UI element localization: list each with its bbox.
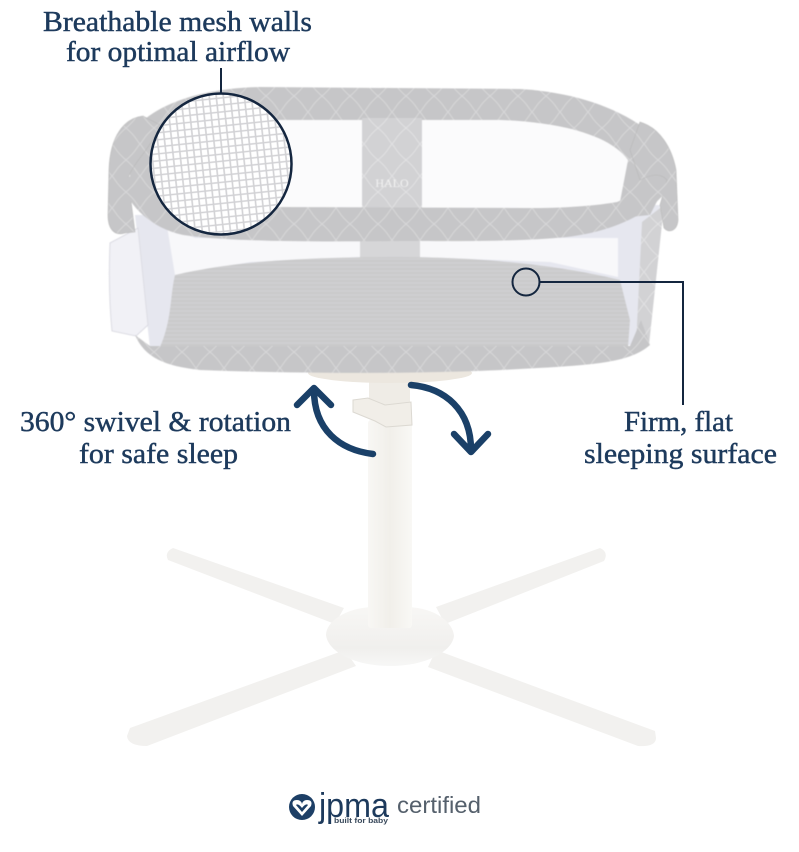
- heading: mesh walls: Breathable mesh walls: [43, 6, 312, 38]
- heading: sleeping surface: Firm, flat: [624, 406, 733, 438]
- icon: jpma heart badge: [289, 794, 315, 820]
- mesh magnifier circle: [150, 94, 292, 234]
- heading: swivel: [20, 406, 292, 470]
- bassinet: [108, 87, 678, 373]
- callout: mesh magnifier: [150, 68, 292, 234]
- heading: mesh walls: for optimal airflow: [66, 36, 290, 68]
- leader line to mesh circle: [220, 68, 222, 94]
- underside disc: [308, 363, 472, 383]
- base hub: [326, 607, 454, 666]
- pole: [368, 420, 412, 628]
- lower mesh window right: [419, 238, 618, 277]
- base leg: top left: [167, 548, 344, 624]
- heading: mesh walls: [43, 6, 312, 68]
- lower mesh window left: [167, 226, 360, 275]
- tagline: built for baby: [334, 818, 388, 825]
- jpma certified logo: [289, 787, 481, 825]
- base leg: top right: [436, 548, 606, 624]
- left mesh pocket: [109, 228, 148, 336]
- certified text: certified: [397, 792, 481, 818]
- front rim: [125, 175, 667, 241]
- neck: [369, 378, 410, 408]
- base leg: bottom right: [428, 650, 656, 746]
- lower centre strap: [360, 238, 420, 258]
- callout: sleeping surface marker: [512, 268, 683, 405]
- swivel clamp: [353, 398, 412, 427]
- rim silhouette: [130, 87, 668, 241]
- bottom band: [135, 320, 650, 373]
- left flap: [108, 116, 160, 234]
- right side fabric: [636, 205, 664, 345]
- stand: pole and cross base: [127, 363, 656, 746]
- heading: swivel: 360° swivel & rotation: [20, 406, 292, 438]
- heading: swivel: for safe sleep: [79, 438, 238, 470]
- arrow: swivel right: [411, 385, 488, 452]
- HALO logo: HALO: [375, 176, 409, 190]
- jpma wordmark: jpma: [318, 787, 389, 825]
- back centre strap: [362, 118, 422, 210]
- heading: sleeping surface: [584, 406, 777, 470]
- right flap: [630, 122, 678, 231]
- arrow: swivel left: [297, 388, 373, 454]
- mesh body: [135, 205, 660, 348]
- surface marker circle: [512, 268, 540, 296]
- base leg: bottom left: [127, 650, 356, 746]
- leader line to label: [540, 282, 683, 405]
- back wall window right: [422, 120, 628, 212]
- heading: sleeping surface: sleeping surface: [584, 438, 777, 470]
- sleeping surface: [160, 257, 630, 347]
- back wall window left: [240, 120, 362, 210]
